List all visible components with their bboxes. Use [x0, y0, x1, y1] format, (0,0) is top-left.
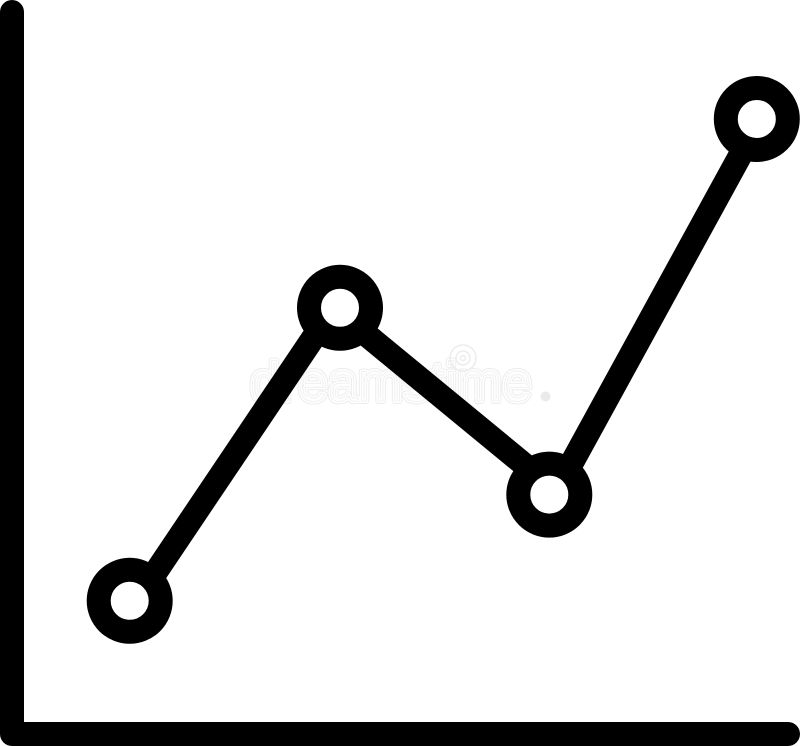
data line segment 2	[340, 313, 549, 485]
data point 2	[309, 277, 371, 339]
data line segment 1	[136, 308, 333, 601]
watermark spiral logo	[450, 345, 476, 371]
watermark wordmark: dreamstime	[250, 350, 532, 413]
data point 1	[99, 570, 161, 632]
watermark registered mark	[540, 392, 550, 402]
data point 4	[726, 88, 788, 150]
watermark	[250, 345, 550, 413]
data point 3	[518, 464, 580, 526]
watermark wordmark: dreamstime	[250, 350, 532, 413]
watermark wordmark: dreamstime	[250, 350, 532, 413]
data line segment 3	[554, 119, 760, 495]
